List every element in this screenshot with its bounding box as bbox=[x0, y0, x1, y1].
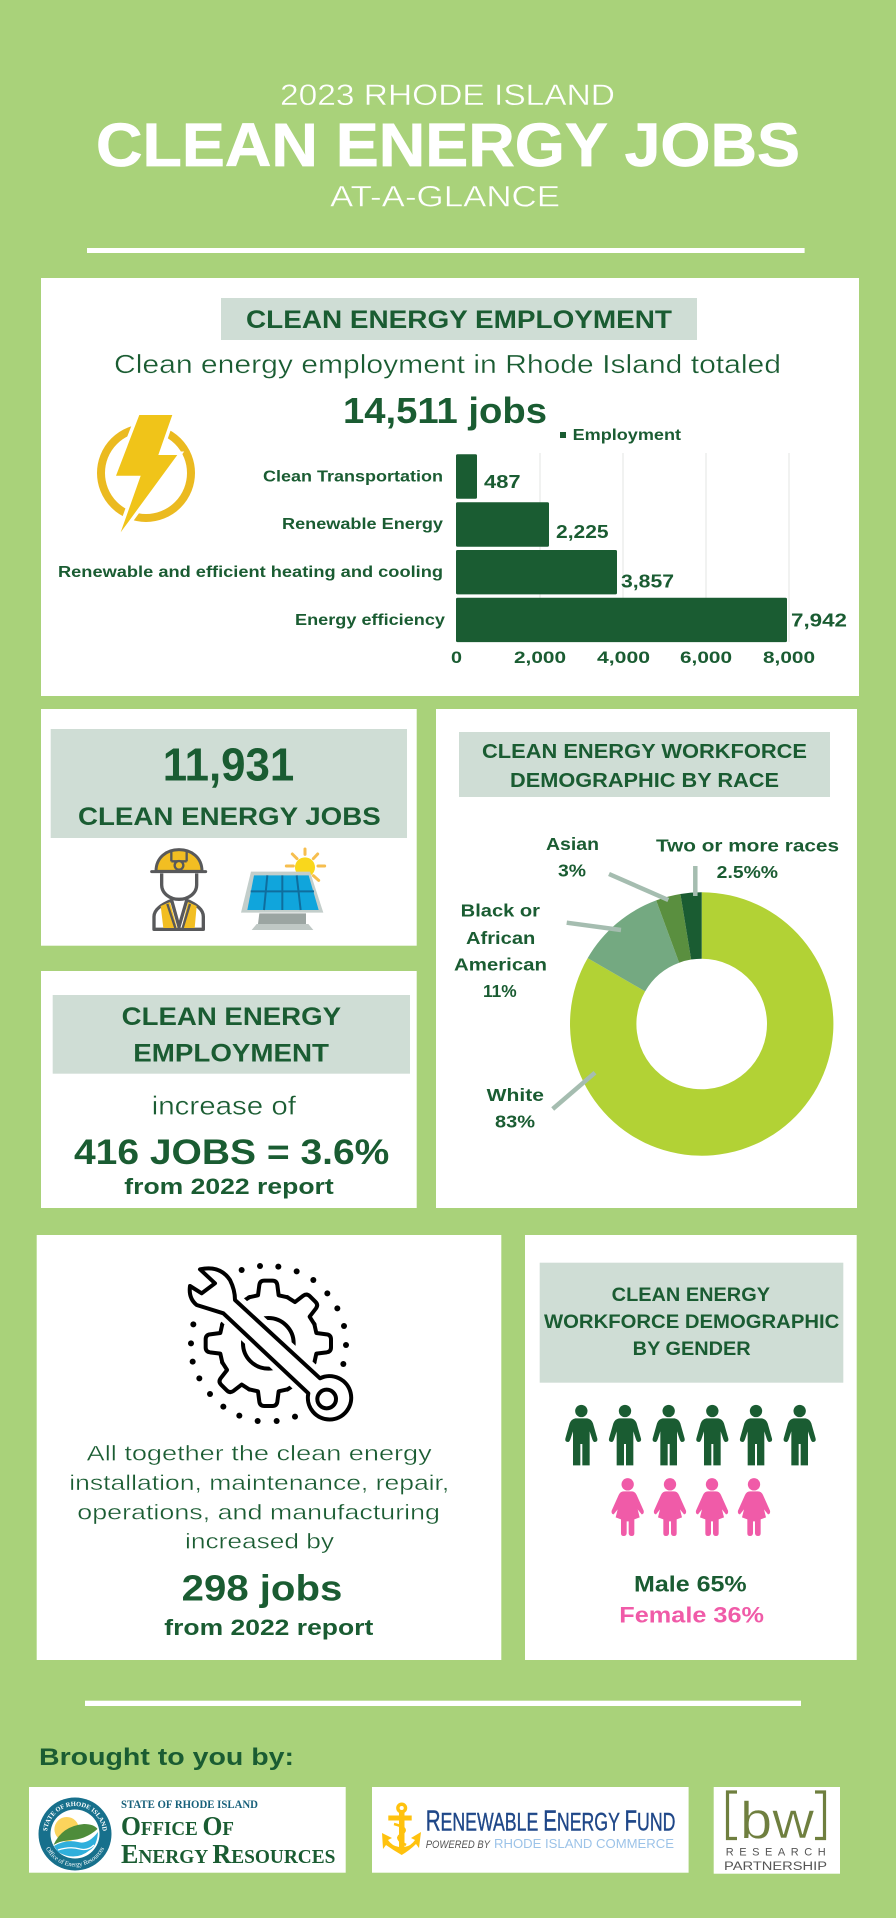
label: asian: 3% bbox=[558, 861, 586, 881]
icon: solar panel with sun bbox=[241, 849, 325, 930]
heading: demographic by race: DEMOGRAPHIC BY RACE bbox=[510, 770, 779, 792]
x axis labels: 6,000 bbox=[680, 648, 732, 667]
bw mark: bw bbox=[740, 1792, 814, 1850]
heading: demographic by race: CLEAN ENERGY WORKFORCE bbox=[482, 741, 807, 763]
increase figure: 416 JOBS = 3.6% bbox=[74, 1133, 389, 1172]
label: black or african american: American bbox=[454, 955, 547, 975]
heading: clean energy employment: EMPLOYMENT bbox=[133, 1040, 329, 1068]
segment: black or african american bbox=[588, 900, 679, 991]
bar: clean transportation: 487 bbox=[484, 472, 521, 492]
bar chart: employment by sector bbox=[58, 427, 847, 667]
logo wordmark bbox=[426, 1806, 675, 1851]
stat: female share: Female 36% bbox=[619, 1602, 764, 1627]
label: asian bbox=[546, 834, 599, 881]
stat: male share: Male 65% bbox=[634, 1572, 747, 1597]
panel: 11,931 clean energy jobs bbox=[41, 709, 417, 946]
label: black or african american: African bbox=[466, 928, 535, 948]
heading: demographic by gender: BY GENDER bbox=[633, 1339, 751, 1360]
label: black or african american: Black or bbox=[461, 901, 540, 921]
body text: operations, and manufacturing bbox=[77, 1500, 440, 1524]
icon: wrench and gear bbox=[188, 1263, 351, 1424]
label: asian: Asian bbox=[546, 834, 599, 854]
bar: renewable energy: 2,225 bbox=[556, 522, 609, 542]
heading: clean energy employment bbox=[221, 298, 697, 340]
logo: renewable energy fund bbox=[372, 1787, 689, 1873]
title kicker: 2023 RHODE ISLAND bbox=[280, 79, 615, 112]
research partnership wordmark: PARTNERSHIP bbox=[724, 1861, 827, 1873]
label: white: White bbox=[487, 1085, 544, 1105]
icon: state seal: Office of Energy Resources bbox=[46, 1847, 104, 1868]
header title block bbox=[96, 79, 800, 214]
icon: construction worker bbox=[152, 850, 206, 929]
research partnership wordmark bbox=[724, 1847, 827, 1873]
leader lines bbox=[553, 866, 695, 1109]
heading: jobs total: CLEAN ENERGY JOBS bbox=[78, 803, 381, 831]
x axis labels bbox=[451, 648, 815, 667]
title subline: AT-A-GLANCE bbox=[330, 181, 560, 214]
x axis labels: 8,000 bbox=[763, 648, 815, 667]
heading: demographic by gender bbox=[540, 1263, 843, 1383]
label: black or african american: 11% bbox=[483, 981, 517, 1001]
bar: energy efficiency: Energy efficiency bbox=[295, 612, 445, 629]
icon: lightning bolt in ring bbox=[101, 415, 191, 532]
x axis labels: 0 bbox=[451, 648, 462, 667]
label: two or more races bbox=[656, 836, 839, 882]
segment: white bbox=[570, 892, 833, 1156]
logo wordmark: POWERED BY bbox=[426, 1839, 491, 1851]
body text: installation, maintenance, repair, bbox=[69, 1471, 449, 1495]
total jobs figure: 14,511 jobs bbox=[343, 390, 547, 431]
panel: demographic by race bbox=[436, 709, 857, 1208]
segment: two or more races bbox=[680, 892, 702, 960]
panel: employment increase bbox=[41, 971, 417, 1208]
logo: office of energy resources bbox=[29, 1787, 346, 1873]
icon: anchor bbox=[382, 1804, 421, 1855]
label: white bbox=[487, 1085, 544, 1132]
figure: 298 jobs: 298 jobs bbox=[182, 1568, 342, 1609]
bar: renewable and efficient heating and cooling: 3,857 bbox=[621, 572, 674, 592]
label: two or more races: Two or more races bbox=[656, 836, 839, 856]
heading: jobs total bbox=[51, 729, 407, 838]
logo wordmark: RENEWABLE ENERGY FUND bbox=[426, 1806, 675, 1838]
heading: clean energy employment: CLEAN ENERGY bbox=[122, 1003, 341, 1031]
main title: CLEAN ENERGY JOBS bbox=[96, 111, 800, 179]
icon: state seal bbox=[38, 1798, 112, 1870]
bar: renewable and efficient heating and cooling: Renewable and efficient heating and cooling bbox=[58, 564, 443, 581]
logo wordmark bbox=[121, 1799, 335, 1869]
bar: clean transportation bbox=[263, 454, 521, 499]
credits heading: Brought to you by: bbox=[39, 1744, 294, 1771]
label: black or african american bbox=[454, 901, 547, 1001]
body text bbox=[69, 1442, 449, 1553]
heading: demographic by gender: WORKFORCE DEMOGRAPHIC bbox=[544, 1312, 840, 1333]
label: white: 83% bbox=[495, 1112, 535, 1132]
logo wordmark: RHODE ISLAND COMMERCE bbox=[494, 1836, 674, 1851]
bar: energy efficiency: 7,942 bbox=[791, 611, 847, 631]
increase text: increase of bbox=[152, 1090, 297, 1120]
comparison note: from 2022 report bbox=[164, 1615, 374, 1640]
bar: clean transportation: Clean Transportation bbox=[263, 469, 443, 486]
bar: renewable and efficient heating and cooling bbox=[58, 550, 674, 594]
logo: bw research partnership bbox=[714, 1787, 840, 1874]
panel: demographic by gender bbox=[525, 1235, 857, 1660]
panel: maintenance and manufacturing increase bbox=[37, 1235, 501, 1660]
segment: asian bbox=[656, 894, 691, 963]
pictogram: male figures bbox=[565, 1405, 816, 1465]
heading: jobs total: 11,931 bbox=[163, 739, 294, 791]
body text: increased by bbox=[185, 1529, 334, 1553]
pictogram: female figures bbox=[612, 1478, 770, 1536]
body text: All together the clean energy bbox=[87, 1442, 432, 1466]
bar: renewable energy bbox=[282, 502, 609, 547]
label: two or more races: 2.5%% bbox=[717, 862, 778, 882]
logo wordmark: STATE OF RHODE ISLAND bbox=[121, 1799, 258, 1811]
panel: clean energy employment bbox=[41, 278, 859, 696]
heading: clean energy employment bbox=[53, 995, 410, 1074]
x axis labels: 2,000 bbox=[514, 648, 566, 667]
intro sentence: Clean energy employment in Rhode Island totaled bbox=[114, 349, 781, 379]
heading: demographic by race bbox=[459, 732, 830, 797]
heading: clean energy employment: CLEAN ENERGY EMPLOYMENT bbox=[246, 306, 672, 334]
logo wordmark: OFFICE OF bbox=[121, 1811, 234, 1841]
icon: state seal: STATE OF RHODE ISLAND bbox=[43, 1802, 107, 1831]
bar: energy efficiency bbox=[295, 598, 847, 642]
logo wordmark: ENERGY RESOURCES bbox=[121, 1839, 335, 1869]
comparison note: from 2022 report bbox=[124, 1174, 335, 1199]
heading: demographic by gender: CLEAN ENERGY bbox=[612, 1285, 770, 1306]
research partnership wordmark: RESEARCH bbox=[726, 1847, 826, 1859]
donut chart: workforce by race bbox=[570, 892, 833, 1156]
x axis labels: 4,000 bbox=[597, 648, 650, 667]
chart legend: Employment bbox=[573, 427, 681, 444]
bar: renewable energy: Renewable Energy bbox=[282, 516, 443, 533]
